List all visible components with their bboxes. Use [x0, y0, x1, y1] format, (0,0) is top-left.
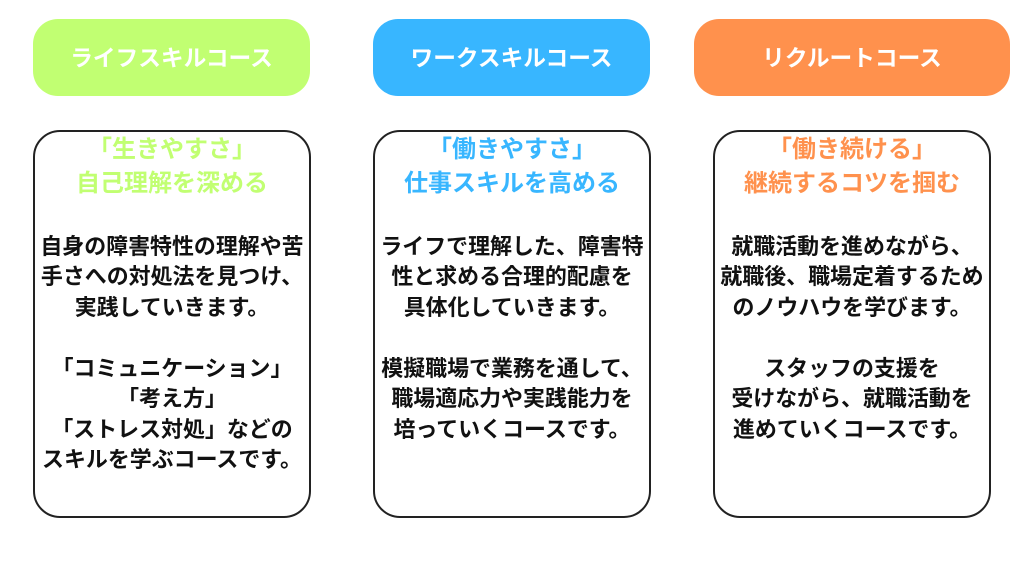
- heading: life skills: 「生きやすさ」: [88, 136, 256, 163]
- text block: work skills practice: 培っていくコースです。: [394, 417, 630, 442]
- heading: life skills: [76, 136, 268, 197]
- panel: recruit: [713, 130, 991, 518]
- text block: life skills description: 自身の障害特性の理解や苦: [40, 234, 304, 259]
- course pill: work skills: ワークスキルコース: [411, 45, 612, 71]
- text block: work skills practice: 職場適応力や実践能力を: [391, 386, 633, 411]
- text block: work skills practice: [381, 356, 643, 442]
- text block: work skills description: ライフで理解した、障害特: [380, 234, 644, 259]
- heading: work skills: 仕事スキルを高める: [404, 170, 620, 197]
- heading: life skills: 自己理解を深める: [76, 170, 268, 197]
- text block: life skills description: 手さへの対処法を見つけ、: [41, 264, 303, 289]
- panel: work skills: [373, 130, 651, 518]
- text block: recruit description: 就職後、職場定着するため: [720, 264, 984, 289]
- text block: recruit description: のノウハウを学びます。: [732, 295, 972, 320]
- heading: work skills: 「働きやすさ」: [428, 136, 596, 163]
- heading: recruit: 「働き続ける」: [768, 136, 936, 163]
- text block: life skills description: 実践していきます。: [75, 295, 269, 320]
- heading: recruit: 継続するコツを掴む: [744, 170, 960, 197]
- text block: life skills topics: 「ストレス対処」などの: [51, 417, 293, 442]
- text block: recruit support: [731, 356, 973, 442]
- text block: work skills practice: 模擬職場で業務を通して、: [381, 356, 643, 381]
- text block: recruit support: 進めていくコースです。: [733, 417, 971, 442]
- course pill: recruit: [694, 19, 1010, 96]
- text block: recruit support: スタッフの支援を: [764, 356, 940, 381]
- text block: work skills description: [380, 234, 644, 320]
- text block: recruit description: [720, 234, 984, 320]
- text block: recruit support: 受けながら、就職活動を: [731, 386, 973, 411]
- text block: work skills description: 具体化していきます。: [404, 295, 620, 320]
- text block: life skills topics: [42, 356, 302, 472]
- course pill: recruit: リクルートコース: [762, 45, 942, 71]
- text block: life skills topics: 「コミュニケーション」: [52, 356, 292, 381]
- course pill: work skills: [373, 19, 650, 96]
- heading: work skills: [404, 136, 620, 197]
- panel: life skills: [33, 130, 311, 518]
- course pill: life skills: [33, 19, 310, 96]
- text block: life skills description: [40, 234, 304, 320]
- text block: life skills topics: スキルを学ぶコースです。: [42, 447, 302, 472]
- course pill: life skills: ライフスキルコース: [70, 45, 273, 71]
- text block: life skills topics: 「考え方」: [117, 386, 227, 411]
- heading: recruit: [744, 136, 960, 197]
- text block: work skills description: 性と求める合理的配慮を: [391, 264, 633, 289]
- text block: recruit description: 就職活動を進めながら、: [731, 234, 973, 259]
